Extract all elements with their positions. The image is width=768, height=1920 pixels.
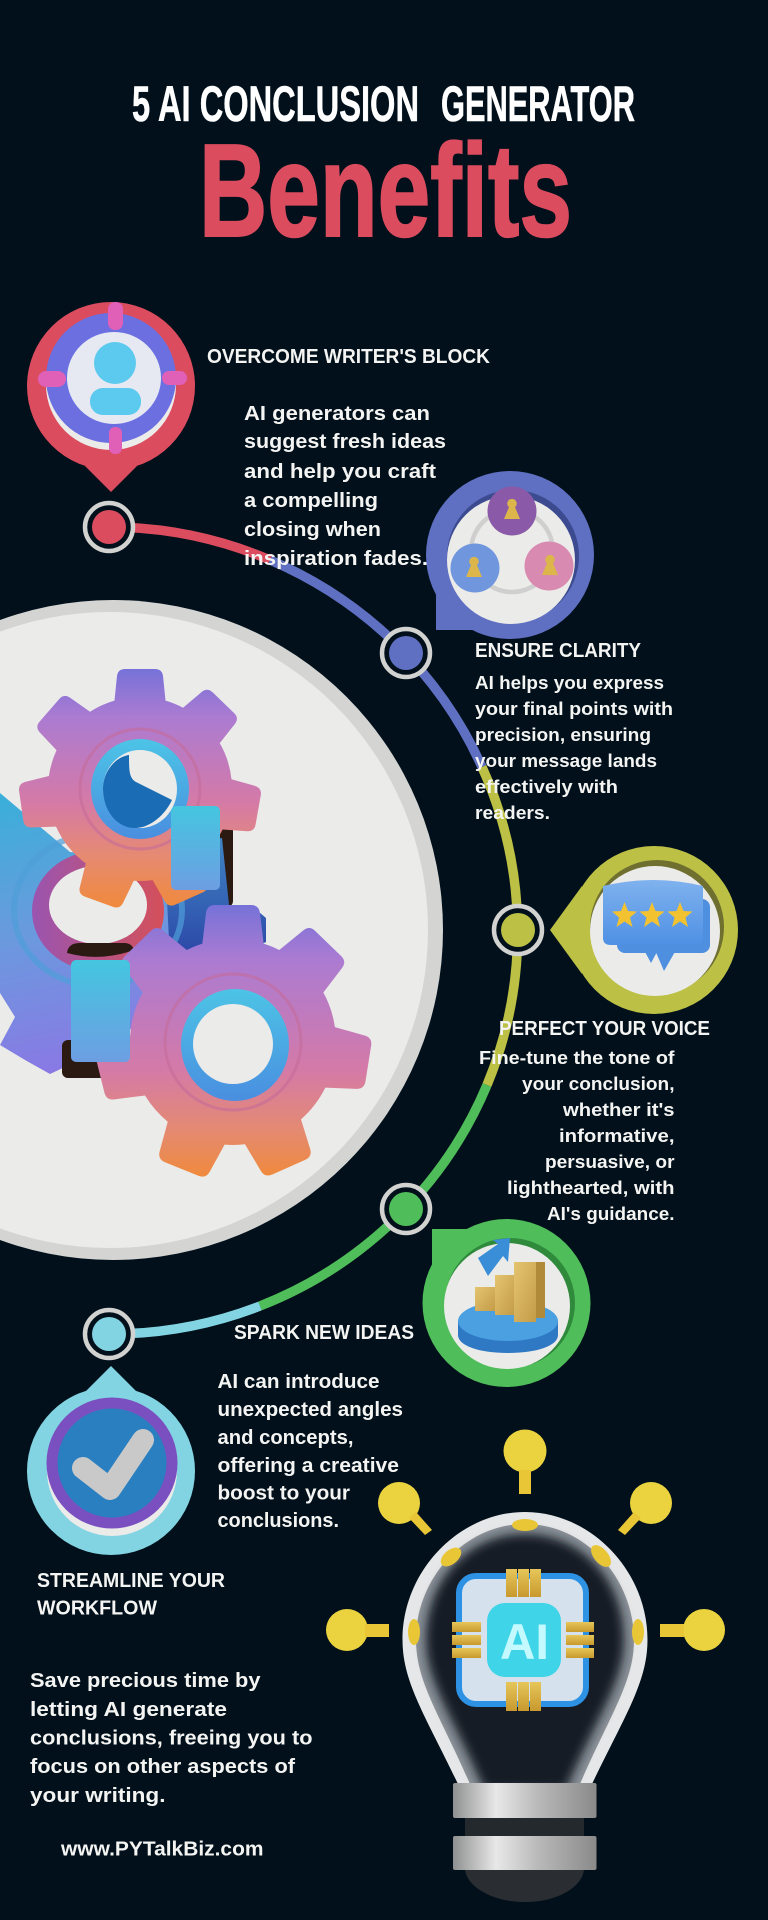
gear: top gear (19, 669, 261, 908)
text: overcome writer's block: suggest fresh ideas (244, 431, 446, 453)
text: ensure clarity (475, 640, 673, 823)
chip (459, 1576, 586, 1704)
node 3 (494, 906, 542, 954)
heading: Benefits: Benefits (199, 117, 572, 264)
text: ensure clarity: your final points with (475, 698, 673, 719)
metal base (465, 1816, 584, 1838)
text: perfect your voice: persuasive, or (545, 1151, 674, 1172)
text: streamline your workflow: STREAMLINE YOUR (37, 1570, 226, 1592)
text: perfect your voice: PERFECT YOUR VOICE (499, 1018, 710, 1040)
text: perfect your voice: whether it's (562, 1099, 674, 1120)
icon: star rating bubble (550, 846, 738, 1014)
big circle with gears (0, 600, 443, 1260)
text: spark new ideas: boost to your (218, 1482, 350, 1504)
text: streamline your workflow: WORKFLOW (37, 1598, 157, 1620)
text: streamline your workflow (30, 1570, 312, 1807)
bulb rays (326, 1430, 725, 1651)
text: overcome writer's block: closing when (244, 519, 381, 541)
gear: bottom gear (71, 900, 380, 1185)
node 2 (382, 629, 430, 677)
text: perfect your voice: informative, (559, 1125, 674, 1146)
icon: bar chart on disc (422, 1219, 590, 1387)
text: spark new ideas: SPARK NEW IDEAS (234, 1322, 414, 1344)
text: streamline your workflow: conclusions, freeing you to (30, 1728, 312, 1750)
text: overcome writer's block: AI generators can (244, 403, 430, 425)
node 5 (85, 1310, 133, 1358)
gold glass studs (408, 1519, 644, 1645)
text: spark new ideas: offering a creative (218, 1455, 399, 1477)
text: overcome writer's block: a compelling (244, 490, 378, 512)
timeline arc (109, 527, 518, 1334)
glass (402, 1512, 648, 1784)
dark shadow block upper (159, 787, 233, 907)
heading: subtitle left: 5 AI CONCLUSION (132, 76, 419, 132)
website url: www.PYTalkBiz.com (60, 1838, 264, 1860)
node 4 (382, 1185, 430, 1233)
text: streamline your workflow: your writing. (30, 1785, 166, 1807)
text: overcome writer's block (207, 346, 491, 570)
icon: AI light bulb (326, 1430, 725, 1902)
text: perfect your voice: Fine-tune the tone of (479, 1047, 675, 1068)
text: spark new ideas: conclusions. (218, 1510, 339, 1532)
text: spark new ideas: AI can introduce (218, 1371, 380, 1393)
text: streamline your workflow: Save precious time by (30, 1670, 261, 1692)
timeline nodes (85, 503, 542, 1358)
text: spark new ideas: unexpected angles (218, 1399, 403, 1421)
icon: AI light bulb: AI (500, 1614, 549, 1670)
heading: subtitle right: GENERATOR (441, 76, 635, 132)
text: ensure clarity: precision, ensuring (475, 724, 651, 745)
text: ensure clarity: your message lands (475, 750, 657, 771)
text: ensure clarity: AI helps you express (475, 672, 664, 693)
icon: check mark pin (27, 1366, 195, 1555)
icon: target person pin (27, 302, 195, 492)
node 1 (85, 503, 133, 551)
text: ensure clarity: effectively with (475, 776, 618, 797)
text: overcome writer's block: inspiration fades. (244, 548, 428, 570)
text: ensure clarity: readers. (475, 802, 550, 823)
icon: team speech bubble (426, 471, 594, 639)
text: streamline your workflow: focus on other aspects of (30, 1756, 295, 1778)
text: perfect your voice: your conclusion, (522, 1073, 674, 1094)
text: spark new ideas: and concepts, (218, 1427, 354, 1449)
text: perfect your voice: lighthearted, with (507, 1177, 674, 1198)
text: overcome writer's block: and help you craft (244, 461, 436, 483)
dark shadow block lower (62, 1040, 137, 1078)
text: streamline your workflow: letting AI generate (30, 1699, 227, 1721)
gear: blue back gear (0, 793, 266, 1074)
text: perfect your voice (479, 1018, 710, 1224)
text: spark new ideas (218, 1322, 414, 1532)
text: perfect your voice: AI's guidance. (547, 1203, 674, 1224)
text: overcome writer's block: OVERCOME WRITER'S BLOCK (207, 346, 491, 368)
title (132, 76, 635, 264)
text: ensure clarity: ENSURE CLARITY (475, 640, 642, 662)
